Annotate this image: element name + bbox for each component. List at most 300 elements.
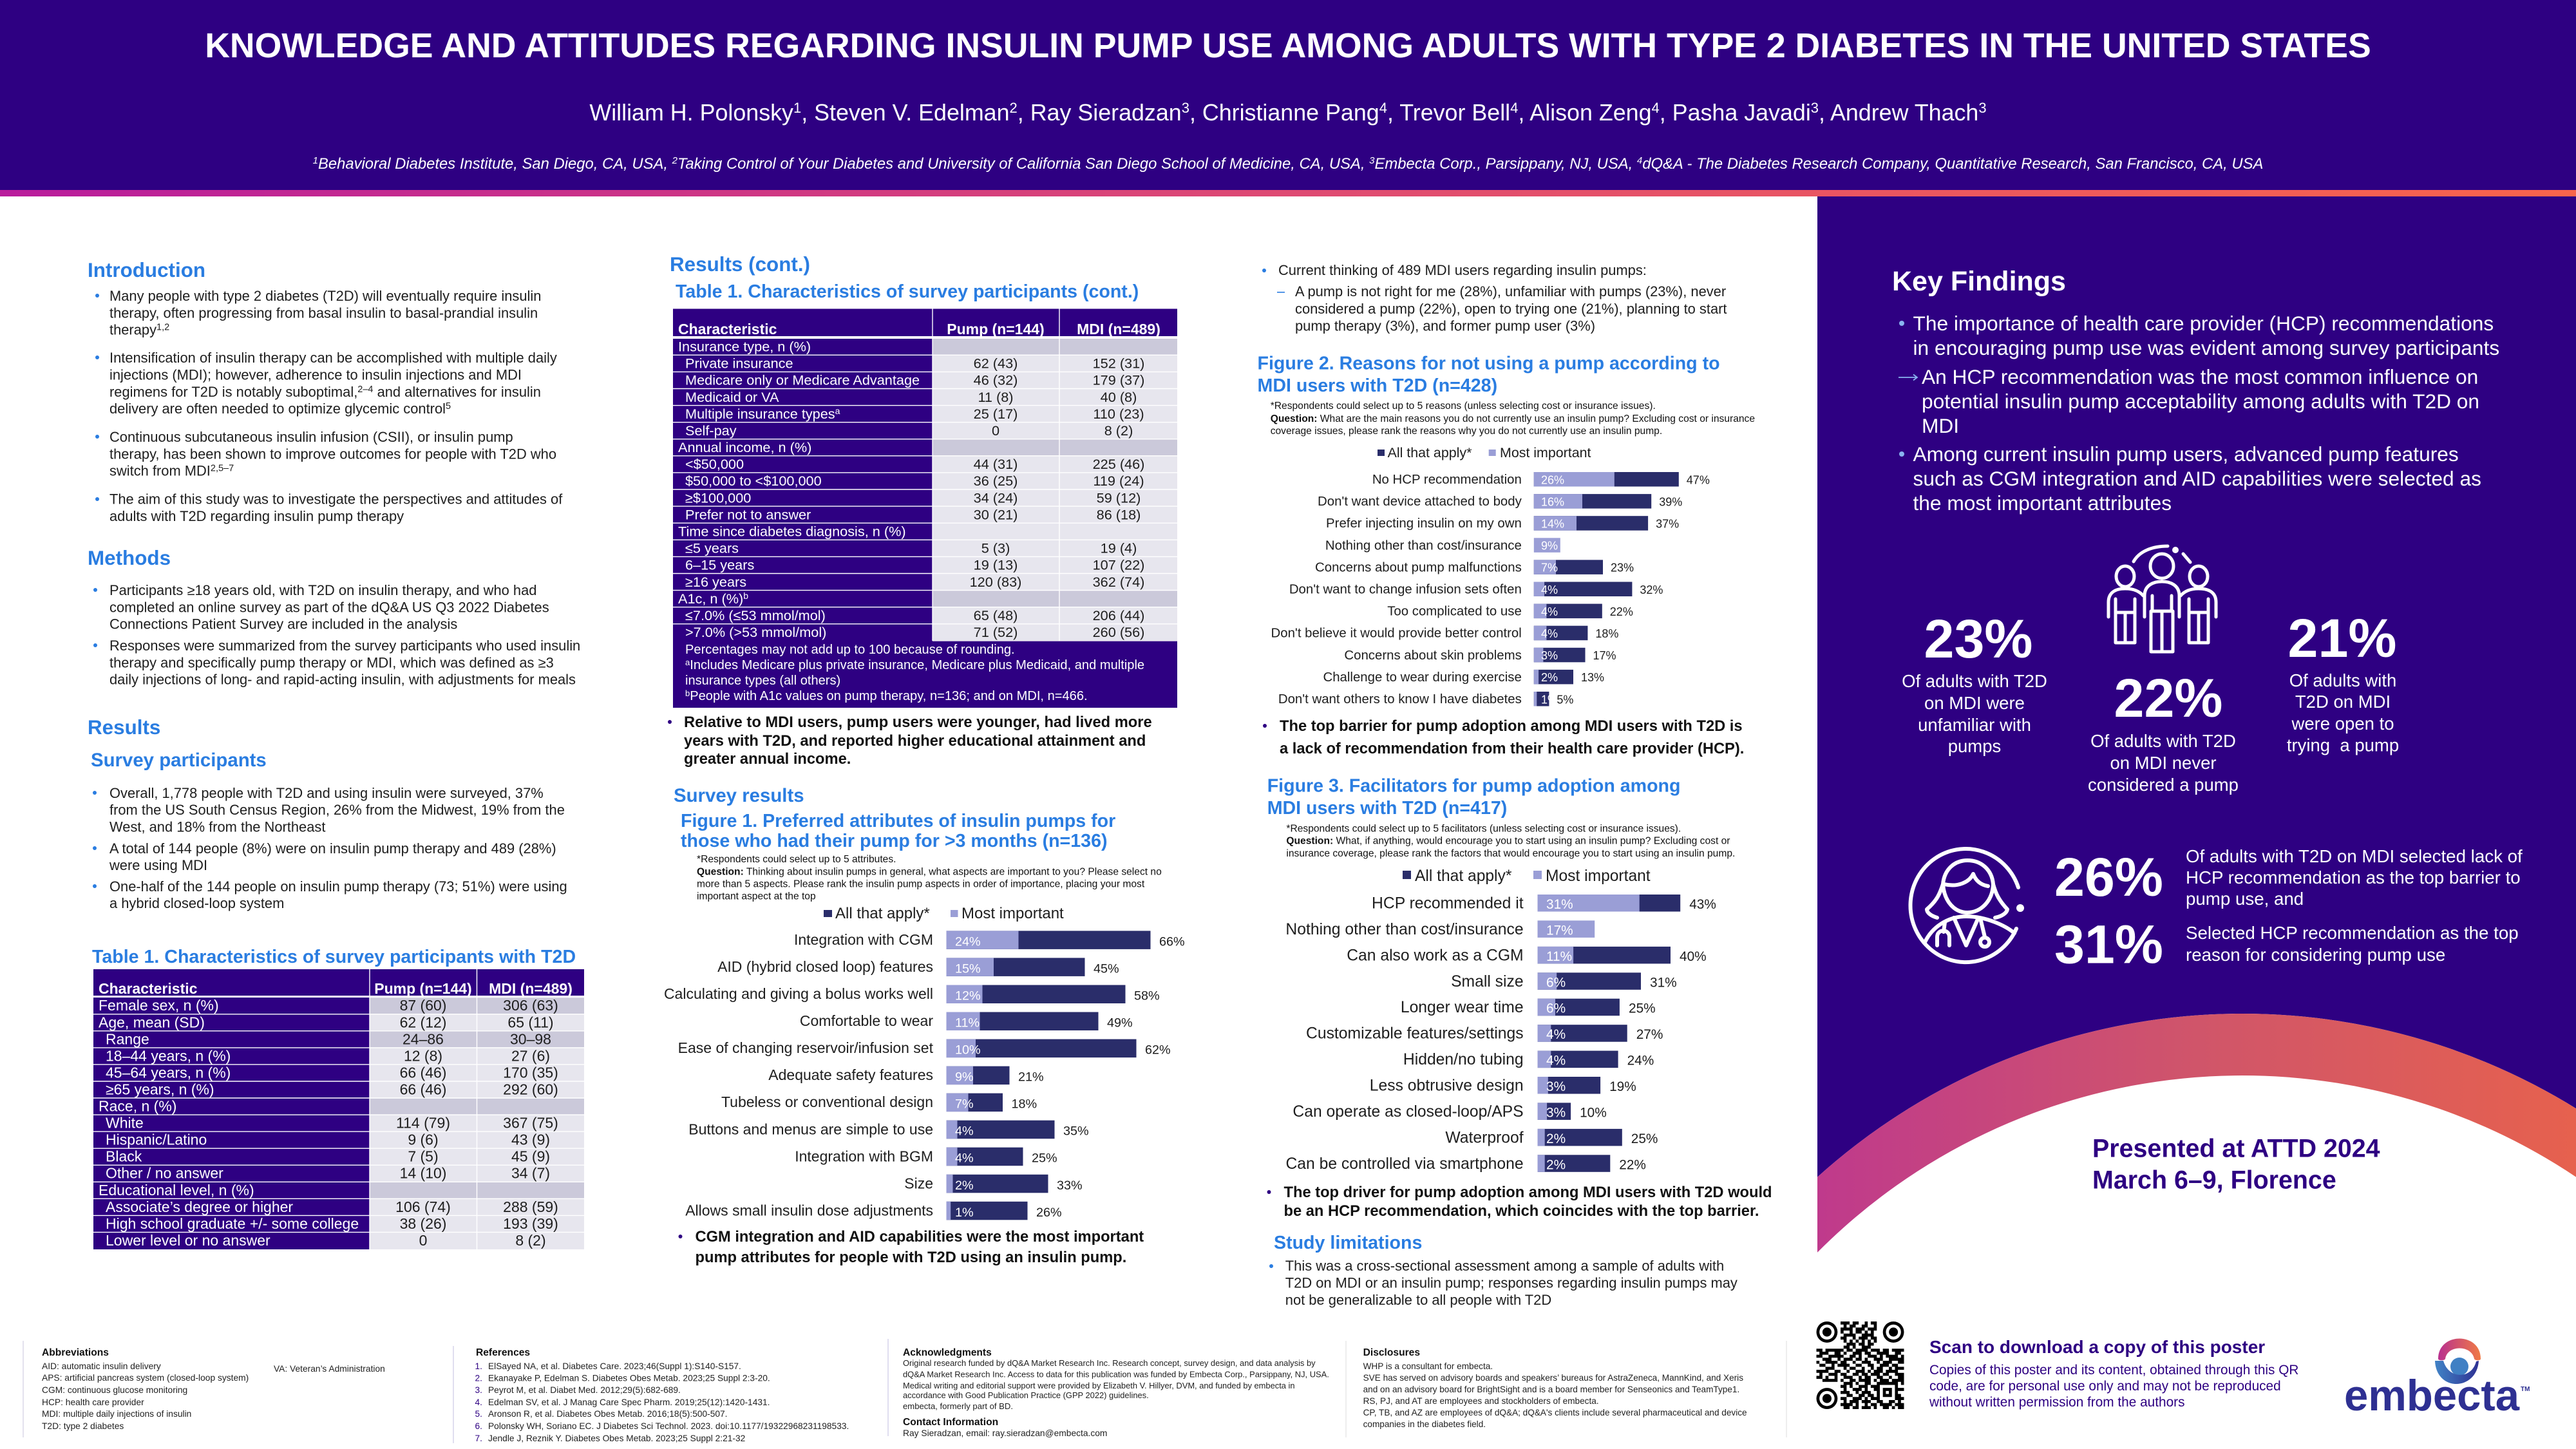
table row labels cont: b — [743, 591, 748, 601]
takeaway: table: Relative to MDI users, pump users were younger, had lived more — [684, 714, 1152, 731]
bar chart: figure 3 — [1285, 895, 1716, 1173]
bar chart: figure 1: Integration with BGM — [795, 1148, 933, 1164]
table values cont: 65 (48) — [974, 607, 1018, 623]
table row labels cont: <$50,000 — [685, 456, 744, 472]
footer: references: 4. — [475, 1397, 482, 1407]
bar chart: figure 3: 31% — [1546, 897, 1573, 912]
bar chart: figure 1: 49% — [1107, 1016, 1133, 1030]
bar chart: figure 3: 31% — [1650, 975, 1677, 990]
stat: 22%: on MDI never — [2110, 753, 2217, 773]
table row labels: Associate’s degree or higher — [106, 1198, 293, 1215]
survey participant bullets: A total of 144 people (8%) were on insulin pump therapy and 489 (28%) — [109, 840, 556, 857]
figure 1 title: those who had their pump for >3 months (n=136) — [681, 831, 1108, 851]
survey participant bullets: were using MDI — [109, 857, 207, 873]
table values: 12 (8) — [404, 1047, 442, 1064]
bar chart: figure 2: 18% — [1595, 627, 1618, 640]
table header row: Pump (n=144) — [374, 980, 472, 997]
figure 3 legend: Most important — [1546, 867, 1651, 885]
figure 3 note — [1286, 823, 1735, 859]
bar chart: figure 1: 21% — [1018, 1070, 1044, 1084]
bar chart: figure 1: Size — [904, 1175, 933, 1191]
bar chart: figure 3: 4% — [1546, 1027, 1566, 1042]
bar chart: figure 1: 58% — [1134, 989, 1160, 1003]
bar chart: figure 3: 17% — [1546, 923, 1573, 938]
bar chart: figure 1: 62% — [1145, 1043, 1171, 1057]
bar chart: figure 2: 39% — [1659, 495, 1682, 508]
panel: current thinking bullets: Current thinking of 489 MDI users regarding insulin pumps: — [1278, 262, 1647, 278]
methods bullets — [93, 582, 580, 688]
QR caption — [1929, 1337, 2298, 1410]
footer: abbreviations: T2D: type 2 diabetes — [42, 1421, 124, 1431]
bar chart: figure 3: 3% — [1546, 1105, 1566, 1120]
methods bullets: therapy and specifically pump therapy or MDI, which was defined as ≥3 — [109, 654, 554, 670]
figure 3 note: insurance coverage, please rank the factors that would encourage you to start using an insulin pump. — [1286, 848, 1735, 859]
affiliations: Taking Control of Your Diabetes and University of California San Diego School of Medicine, CA, USA, — [677, 155, 1369, 173]
figure 2 title: MDI users with T2D (n=428) — [1257, 375, 1497, 396]
table values: 27 (6) — [511, 1047, 550, 1064]
table values cont: 206 (44) — [1093, 607, 1144, 623]
table values cont: 8 (2) — [1104, 422, 1133, 439]
intro bullets: injections (MDI); however, adherence to insulin injections and MDI — [109, 366, 522, 383]
QR caption: without written permission from the authors — [1929, 1395, 2184, 1410]
table header row cont — [678, 321, 1160, 337]
table header row: MDI (n=489) — [489, 980, 573, 997]
figure 1 legend: All that apply* — [835, 905, 930, 922]
footer: references: Edelman SV, et al. J Manag Care Spec Pharm. 2019;25(12):1420-1431. — [488, 1397, 770, 1407]
footer: abbreviations: APS: artificial pancreas system (closed-loop system) — [42, 1373, 249, 1383]
figure 3 legend: All that apply* — [1415, 867, 1512, 885]
table values: 43 (9) — [511, 1132, 550, 1148]
bar chart: figure 2: Don't want others to know I have diabetes — [1278, 692, 1522, 706]
methods bullets: completed an online survey as part of the dQ&A US Q3 2022 Diabetes — [109, 599, 549, 615]
bar chart: figure 1: 18% — [1011, 1097, 1037, 1112]
figure 1 legend: Most important — [961, 905, 1064, 922]
table row labels: Black — [106, 1148, 142, 1165]
table values: 66 (46) — [400, 1064, 446, 1081]
logo: embecta — [2344, 1338, 2530, 1420]
survey participant bullets: Overall, 1,778 people with T2D and using insulin were surveyed, 37% — [109, 785, 544, 801]
bar chart: figure 3: 3% — [1546, 1079, 1566, 1094]
heading: methods: Methods — [88, 547, 171, 569]
figure 1 title: Figure 1. Preferred attributes of insulin pumps for — [681, 811, 1115, 831]
figure 1 note: important aspect at the top — [697, 891, 816, 902]
QR caption: Copies of this poster and its content, obtained through this QR — [1929, 1363, 2298, 1378]
table values cont: 46 (32) — [974, 372, 1018, 388]
methods bullets: Connections Patient Survey are included in the analysis — [109, 616, 457, 632]
figure 2 note: *Respondents could select up to 5 reasons (unless selecting cost or insurance issues). — [1271, 401, 1656, 412]
bar chart: figure 3: 25% — [1629, 1001, 1656, 1016]
bar chart: figure 3: Waterproof — [1445, 1129, 1524, 1146]
key findings bullets — [1899, 312, 2499, 515]
stat: 26% and 31% HCP recommendation: HCP recommendation as the top barrier to — [2186, 867, 2521, 887]
figure 2 legend — [1378, 445, 1591, 460]
table row labels cont: ≥$100,000 — [685, 489, 751, 506]
table values cont: 362 (74) — [1093, 574, 1144, 590]
table row labels cont: >7.0% (>53 mmol/mol) — [685, 624, 826, 640]
table values — [395, 997, 558, 1249]
table row labels cont: ≥16 years — [685, 574, 746, 590]
authors: , Christianne Pang — [1189, 100, 1379, 126]
bar chart: figure 1: 45% — [1094, 961, 1119, 976]
footer: acknowledgments and contact: embecta, formerly part of BD. — [903, 1401, 1013, 1411]
bar chart: figure 1: 4% — [955, 1124, 974, 1139]
table values cont: 119 (24) — [1093, 473, 1144, 489]
bar chart: figure 2: Don't want to change infusion sets often — [1289, 582, 1522, 596]
footer: abbreviations: Abbreviations — [42, 1347, 109, 1358]
authors: , Andrew Thach — [1819, 100, 1978, 126]
footer: references: 5. — [475, 1409, 482, 1419]
table values: 306 (63) — [503, 997, 558, 1014]
footer: acknowledgments and contact: Original research funded by dQ&A Market Research Inc. Research concept, survey design, and data analysis by — [903, 1358, 1316, 1368]
heading: results cont: Results (cont.) — [670, 253, 810, 276]
table row labels: White — [106, 1115, 144, 1132]
authors: William H. Polonsky — [589, 100, 793, 126]
table title cont: Table 1. Characteristics of survey participants (cont.) — [676, 281, 1139, 302]
panel: current thinking bullets: pump therapy (3%), and former pump user (3%) — [1295, 318, 1595, 334]
table footnotes: insurance types (all others) — [685, 674, 840, 688]
table values: 292 (60) — [503, 1081, 558, 1097]
authors: , Trevor Bell — [1387, 100, 1510, 126]
table values: 24–86 — [402, 1030, 444, 1047]
bar chart: figure 2: 26% — [1541, 473, 1564, 486]
table header row: Characteristic — [99, 980, 198, 997]
bar chart: figure 2: 4% — [1541, 583, 1558, 596]
bar chart: figure 2: 14% — [1541, 518, 1564, 531]
table footnotes: a — [685, 658, 690, 667]
header banner — [0, 0, 2576, 196]
table values cont: 5 (3) — [981, 540, 1010, 556]
affiliations: Behavioral Diabetes Institute, San Diego, CA, USA, — [318, 155, 672, 173]
footer: disclosures: WHP is a consultant for embecta. — [1363, 1361, 1493, 1371]
takeaway: figure 2: a lack of recommendation from their health care provider (HCP). — [1280, 741, 1744, 757]
intro bullets: adults with T2D regarding insulin pump therapy — [109, 508, 404, 524]
bar chart: figure 1: 9% — [955, 1070, 974, 1084]
stat: 22%: considered a pump — [2088, 775, 2239, 795]
bar chart: figure 3: 24% — [1627, 1054, 1654, 1068]
stat: 26% and 31% HCP recommendation — [2054, 846, 2523, 975]
footer: references: 6. — [475, 1421, 482, 1431]
bar chart: figure 1: Calculating and giving a bolus works well — [664, 985, 933, 1002]
bar chart: figure 3: 11% — [1546, 949, 1572, 964]
stat: 23%: pumps — [1948, 736, 2001, 756]
bar chart: figure 1: Comfortable to wear — [800, 1012, 933, 1029]
footer: acknowledgments and contact: dQ&A Market Research Inc. Access to data for this publication was funded by Embecta Corp., Parsippany, NJ, USA. — [903, 1369, 1329, 1379]
stat: 26% and 31% HCP recommendation: Selected HCP recommendation as the top — [2186, 923, 2519, 943]
table values cont: 30 (21) — [974, 506, 1018, 522]
table values cont: 44 (31) — [974, 456, 1018, 472]
table row labels cont — [678, 339, 920, 640]
logo: embecta: embecta — [2344, 1371, 2520, 1420]
footer: abbreviations: VA: Veteran’s Administration — [274, 1364, 385, 1374]
table row labels cont: A1c, n (%) — [678, 591, 743, 607]
stat: 21%: trying a pump — [2287, 735, 2399, 755]
takeaway: table — [668, 714, 1152, 768]
table header row cont: Characteristic — [678, 321, 777, 337]
intro bullets: The aim of this study was to investigate the perspectives and attitudes of — [109, 491, 563, 507]
bar chart: figure 3: Small size — [1451, 973, 1524, 990]
bar chart: figure 1: 35% — [1063, 1124, 1089, 1139]
figure 2 note: Question: What are the main reasons you do not currently use an insulin pump? Excluding cost or insurance — [1271, 413, 1755, 424]
bar chart: figure 2: Prefer injecting insulin on my own — [1326, 516, 1522, 531]
takeaway: table: years with T2D, and reported higher educational attainment and — [684, 733, 1146, 750]
table footnotes: Includes Medicare plus private insurance, Medicare plus Medicaid, and multiple — [690, 658, 1144, 672]
figure 1 note: *Respondents could select up to 5 attributes. — [697, 854, 896, 865]
bar chart: figure 1: Buttons and menus are simple to use — [688, 1121, 933, 1137]
bar chart: figure 2: Concerns about pump malfunctions — [1315, 560, 1522, 574]
footer: references — [453, 1339, 888, 1443]
authors: 4 — [1510, 100, 1518, 116]
table row labels cont: Medicaid or VA — [685, 389, 779, 405]
footer: disclosures: CP, TB, and AZ are employees of dQ&A; dQ&A's clients include several pharmaceutical and device — [1363, 1408, 1747, 1417]
bar chart: figure 3: 43% — [1689, 897, 1716, 912]
figure 3 legend — [1403, 867, 1651, 885]
table row labels cont: Multiple insurance types — [685, 406, 835, 422]
stat: 22% — [2088, 668, 2239, 795]
bar chart: figure 2: 1% — [1541, 693, 1558, 706]
footer: disclosures: SVE has served on advisory boards and speakers’ bureaus for AstraZeneca, MannKind, and Xeris — [1363, 1373, 1743, 1383]
bar chart: figure 3: 19% — [1609, 1079, 1636, 1094]
panel: study limitations — [1269, 1233, 1738, 1308]
footer: disclosures: and on an advisory board for BrightSight and is a board member for Senseonics and TeamType1. — [1363, 1385, 1739, 1394]
table header row cont: MDI (n=489) — [1077, 321, 1160, 337]
panel: results continued table — [668, 253, 1177, 768]
table row labels: Lower level or no answer — [106, 1232, 270, 1249]
table values: 87 (60) — [400, 997, 446, 1014]
authors: 3 — [1811, 100, 1819, 116]
subheading: survey results: Survey results — [674, 785, 804, 806]
footer: acknowledgments and contact: Contact Information — [903, 1417, 998, 1428]
figure 3 title: Figure 3. Facilitators for pump adoption among — [1267, 775, 1680, 796]
stat: 23%: Of adults with T2D — [1902, 671, 2047, 691]
intro bullets: Intensification of insulin therapy can be accomplished with multiple daily — [109, 350, 557, 366]
panel: current thinking bullets: considered a pump (22%), open to trying one (21%), planning to start — [1295, 301, 1727, 317]
footer: acknowledgments and contact: Ray Sieradzan, email: ray.sieradzan@embecta.com — [903, 1428, 1107, 1438]
figure 3 note: *Respondents could select up to 5 facilitators (unless selecting cost or insurance issues). — [1286, 823, 1681, 835]
bar chart: figure 3: Nothing other than cost/insurance — [1285, 921, 1524, 938]
table row labels: High school graduate +/- some college — [106, 1215, 359, 1232]
bar chart: figure 3: 4% — [1546, 1054, 1566, 1068]
table values cont — [970, 355, 1144, 640]
panel: introduction — [88, 259, 563, 524]
stat: 23%: unfamiliar with — [1918, 715, 2031, 735]
footer: disclosures — [1346, 1341, 1786, 1437]
stat: 26% and 31% HCP recommendation: 26% — [2054, 847, 2163, 907]
key findings bullets: such as CGM integration and AID capabilities were selected as — [1913, 467, 2481, 490]
panel background with arc — [1817, 196, 2576, 1253]
table values cont: 36 (25) — [974, 473, 1018, 489]
affiliations: dQ&A - The Diabetes Research Company, Quantitative Research, San Francisco, CA, USA — [1642, 155, 2263, 173]
table values: 114 (79) — [396, 1115, 450, 1132]
authors: 3 — [1978, 100, 1987, 116]
table values cont: 11 (8) — [978, 389, 1014, 405]
footer: disclosures: RS, PJ, and AT are employees and stockholders of embecta. — [1363, 1396, 1599, 1406]
table values: 9 (6) — [408, 1132, 439, 1148]
table row labels cont: Annual income, n (%) — [678, 439, 811, 455]
bar chart: figure 2: 16% — [1541, 495, 1564, 508]
table values cont: 62 (43) — [974, 355, 1018, 372]
table footnotes: b — [685, 688, 690, 698]
stat: 26% and 31% HCP recommendation: pump use, and — [2186, 889, 2304, 909]
table values cont: 19 (13) — [974, 557, 1018, 573]
footer: abbreviations: HCP: health care provider — [42, 1397, 144, 1407]
bar chart: figure 3: Less obtrusive design — [1370, 1077, 1524, 1095]
heading: study limitations: Study limitations — [1274, 1233, 1422, 1253]
bar chart: figure 1: 1% — [955, 1206, 974, 1220]
footer: references: Ekanayake P, Edelman S. Diabetes Obes Metab. 2023;25 Suppl 2:3-20. — [488, 1374, 770, 1383]
bar chart: figure 2: 23% — [1611, 562, 1634, 574]
conference note: Presented at ATTD 2024 — [2092, 1135, 2380, 1163]
footer: references: ElSayed NA, et al. Diabetes Care. 2023;46(Suppl 1):S140-S157. — [488, 1361, 741, 1371]
bar chart: figure 3: Can be controlled via smartphone — [1285, 1155, 1524, 1173]
key findings bullets: MDI — [1922, 414, 1959, 437]
footer: abbreviations — [23, 1341, 385, 1437]
QR code — [1816, 1321, 1904, 1409]
bar chart: figure 1: 15% — [955, 961, 981, 976]
table row labels: Educational level, n (%) — [99, 1182, 254, 1198]
takeaway: figure 2: The top barrier for pump adoption among MDI users with T2D is — [1280, 718, 1743, 735]
heading: key findings: Key Findings — [1892, 266, 2066, 297]
figure 2 title: Figure 2. Reasons for not using a pump according to — [1257, 354, 1720, 374]
table footnotes: People with A1c values on pump therapy, n=136; and on MDI, n=466. — [690, 689, 1088, 703]
limitations text — [1269, 1258, 1738, 1308]
table values: 193 (39) — [503, 1215, 558, 1232]
table values: 288 (59) — [503, 1198, 558, 1215]
table row labels cont: Prefer not to answer — [685, 506, 811, 522]
bar chart: figure 2 — [1271, 472, 1710, 706]
figure 1 legend — [824, 905, 1064, 922]
footer: references: 7. — [475, 1434, 482, 1443]
panel: results — [88, 716, 567, 911]
table values: 106 (74) — [395, 1198, 451, 1215]
figure 1 note: Question: Thinking about insulin pumps in general, what aspects are important to you? Please select no — [697, 867, 1162, 877]
stat: 21%: T2D on MDI — [2295, 692, 2391, 712]
panel: methods — [88, 547, 580, 688]
bar chart: figure 1: 7% — [955, 1097, 974, 1112]
bar chart: figure 2: Too complicated to use — [1387, 605, 1522, 619]
table values cont: 179 (37) — [1093, 372, 1144, 388]
table row labels cont: Medicare only or Medicare Advantage — [685, 372, 920, 388]
bar chart: figure 3: 25% — [1631, 1132, 1658, 1146]
figure 3 note: Question: What, if anything, would encourage you to start using an insulin pump? Excluding cost or — [1286, 836, 1730, 847]
figure 1 note — [697, 854, 1162, 902]
bar chart: figure 3: 6% — [1546, 1001, 1566, 1016]
footer: acknowledgments and contact: accordance with Good Publication Practice (GPP 2022) guidelines. — [903, 1390, 1149, 1400]
table row labels: Range — [106, 1030, 149, 1047]
stat: 21%: were open to — [2291, 714, 2394, 734]
table values cont: 25 (17) — [974, 406, 1018, 422]
table values cont: 225 (46) — [1093, 456, 1144, 472]
table values: 7 (5) — [408, 1148, 439, 1165]
bar chart: figure 2: 4% — [1541, 605, 1558, 618]
survey participant bullets: West, and 18% from the Northeast — [109, 819, 325, 835]
bar chart: figure 2: Don't believe it would provide better control — [1271, 627, 1522, 641]
bar chart: figure 3: Can operate as closed-loop/APS — [1293, 1103, 1524, 1121]
figure 3 title — [1267, 775, 1680, 819]
table values cont: 34 (24) — [974, 489, 1018, 506]
table values: 65 (11) — [507, 1014, 554, 1030]
footer: acknowledgments and contact: Acknowledgments — [903, 1347, 992, 1358]
bar chart: figure 1: 11% — [955, 1016, 980, 1030]
table values: 62 (12) — [400, 1014, 446, 1030]
footer: references: 3. — [475, 1385, 482, 1395]
QR caption: code, are for personal use only and may not be reproduced — [1929, 1379, 2281, 1394]
table values cont: 19 (4) — [1101, 540, 1137, 556]
icon: people group — [2108, 546, 2216, 652]
bar chart: figure 3: 27% — [1636, 1027, 1663, 1042]
footer: references: Jendle J, Reznik Y. Diabetes Obes Metab. 2023;25 Suppl 2:21-32 — [488, 1434, 745, 1443]
panel: table 1 characteristics — [92, 947, 584, 1249]
bar chart: figure 2: 13% — [1581, 671, 1604, 684]
bar chart: figure 1: Ease of changing reservoir/infusion set — [678, 1039, 934, 1056]
bar chart: figure 3: 6% — [1546, 975, 1566, 990]
stat: 21%: Of adults with — [2289, 670, 2396, 690]
bar chart: figure 1: 66% — [1159, 934, 1185, 949]
table values: 170 (35) — [503, 1064, 558, 1081]
table values cont: 260 (56) — [1093, 624, 1144, 640]
table values: 66 (46) — [400, 1081, 446, 1097]
footer: references: Aronson R, et al. Diabetes Obes Metab. 2016;18(5):500-507. — [488, 1409, 727, 1419]
key findings bullets: potential insulin pump acceptability among adults with T2D on — [1922, 390, 2479, 413]
table row labels cont: Self-pay — [685, 422, 737, 439]
table row labels cont: Private insurance — [685, 355, 793, 372]
figure 2 title — [1257, 354, 1720, 396]
bar chart: figure 1: AID (hybrid closed loop) features — [717, 958, 933, 975]
authors: , Alison Zeng — [1518, 100, 1652, 126]
bar chart: figure 3: Can also work as a CGM — [1347, 947, 1524, 964]
takeaway: figure 3: The top driver for pump adoption among MDI users with T2D would — [1284, 1184, 1772, 1201]
survey participant bullets: from the US South Census Region, 26% from the Midwest, 19% from the — [109, 802, 565, 818]
stat: 21% — [2287, 608, 2399, 755]
figure 2 legend: All that apply* — [1388, 445, 1472, 460]
panel: current thinking bullets — [1262, 262, 1727, 334]
affiliations: 4 — [1637, 155, 1642, 166]
takeaway: figure 2 — [1263, 718, 1744, 757]
survey participant bullets: a hybrid closed-loop system — [109, 895, 284, 911]
bar chart: figure 2: 7% — [1541, 562, 1558, 574]
intro bullets: 2,5–7 — [211, 464, 234, 474]
authors: , Steven V. Edelman — [801, 100, 1010, 126]
table values cont: 120 (83) — [970, 574, 1021, 590]
key findings bullets: in encouraging pump use was evident among survey participants — [1913, 336, 2499, 359]
authors: 1 — [793, 100, 801, 116]
key findings bullets: the most important attributes — [1913, 491, 2172, 515]
intro bullets: regimens for T2D is notably suboptimal, — [109, 384, 357, 400]
bar chart: figure 3: Hidden/no tubing — [1403, 1051, 1524, 1068]
QR caption: Scan to download a copy of this poster — [1929, 1337, 2265, 1357]
footer: abbreviations: AID: automatic insulin delivery — [42, 1361, 161, 1371]
intro bullets: delivery are often needed to optimize glycemic control — [109, 401, 446, 417]
takeaway: figure 3: be an HCP recommendation, which coincides with the top barrier. — [1284, 1203, 1759, 1220]
intro bullets: therapy, often progressing from basal insulin to basal-prandial insulin — [109, 305, 538, 321]
stat: 23%: on MDI were — [1924, 693, 2025, 713]
table grid — [93, 969, 584, 1249]
bar chart: figure 2: 17% — [1593, 649, 1616, 662]
intro bullets: therapy, has been shown to improve outcomes for people with T2D who — [109, 446, 556, 462]
methods bullets: Responses were summarized from the survey participants who used insulin — [109, 638, 580, 654]
key findings bullets: Among current insulin pump users, advanced pump features — [1913, 442, 2459, 466]
table row labels: Age, mean (SD) — [99, 1014, 205, 1030]
table values: 14 (10) — [400, 1165, 446, 1182]
table values cont: 110 (23) — [1093, 406, 1144, 422]
stat: 26% and 31% HCP recommendation: 31% — [2054, 914, 2163, 975]
bar chart: figure 2: 5% — [1557, 693, 1573, 706]
figure 3 title: MDI users with T2D (n=417) — [1267, 798, 1507, 819]
logo: embecta: TM — [2521, 1386, 2530, 1393]
stat: 21%: 21% — [2288, 608, 2396, 668]
footer: abbreviations: CGM: continuous glucose monitoring — [42, 1385, 187, 1395]
intro bullets: switch from MDI — [109, 463, 211, 479]
table row labels cont: a — [835, 406, 840, 416]
